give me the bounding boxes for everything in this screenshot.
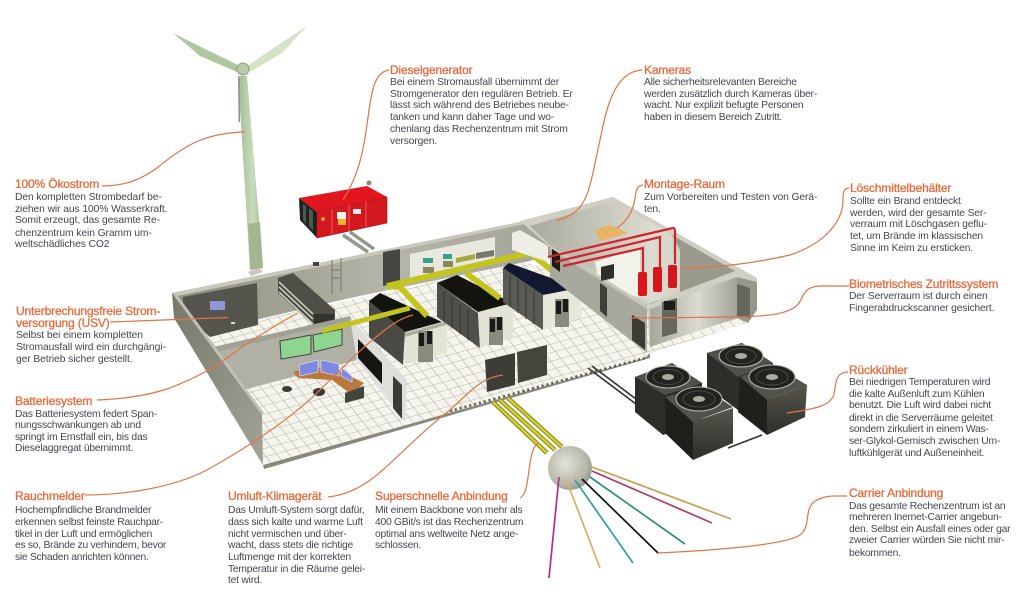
text: Kameras: haben in diesem Bereich Zutritt. xyxy=(644,112,782,123)
text: Rückkühler: luftkühlgerät und Außeneinheit. xyxy=(849,448,984,459)
text: Rückkühler: benutzt. Die Luft wird dabei nicht xyxy=(849,400,991,411)
text: Superschnelle Anbindung: Superschnelle Anbindung xyxy=(375,489,508,503)
green wall screens xyxy=(280,329,342,359)
text: Kameras: Alle sicherheitsrelevanten Bereiche xyxy=(644,77,797,88)
text: Löschmittelbehälter: werden, wird der gesamte Ser- xyxy=(849,208,986,219)
text: Batteriesystem xyxy=(15,394,157,454)
text: Biometrisches Zutrittssystem: Der Serverraum ist durch einen xyxy=(849,291,988,302)
text: Umluft-Klimagerät: tet wird. xyxy=(228,575,262,586)
text: USV: ger Betrieb sicher gestellt. xyxy=(16,354,133,365)
text: Rückkühler xyxy=(849,363,1000,459)
wind turbine xyxy=(173,26,307,276)
text: Rauchmelder: tikel in der Luft und ermöglichen xyxy=(15,529,153,540)
text: Löschmittelbehälter: Löschmittelbehälter xyxy=(850,181,951,195)
cable to dry coolers xyxy=(588,366,762,448)
text: Superschnelle Anbindung: optimal ans weltweite Netz ange- xyxy=(375,529,518,540)
text: 100% Ökostrom xyxy=(14,177,167,250)
text: USV: Unterbrechungsfreie Strom- xyxy=(16,304,160,318)
text: Carrier Anbindung: Carrier Anbindung xyxy=(849,486,943,500)
text: Biometrisches Zutrittssystem xyxy=(849,277,998,314)
control room partition xyxy=(213,318,357,390)
text: Batteriesystem: Dieselaggregat übernimmt. xyxy=(15,443,133,454)
leader lines xyxy=(85,70,849,553)
text: Biometrisches Zutrittssystem: Biometrisches Zutrittssystem xyxy=(849,277,998,291)
cable tube to backbone xyxy=(493,398,562,453)
text: Biometrisches Zutrittssystem: Fingerabdruckscanner gesichert. xyxy=(849,303,994,314)
text: 100% Ökostrom: Den kompletten Strombedarf be- xyxy=(15,192,162,203)
text: Dieselgenerator: lässt sich während des Betriebes neube- xyxy=(390,100,569,111)
text: Dieselgenerator: chenlang das Rechenzentrum mit Strom xyxy=(390,124,568,135)
text: Umluft-Klimagerät xyxy=(227,489,365,586)
text: Rauchmelder: erkennen selbst feinste Rauchpar- xyxy=(15,517,163,528)
text: Dieselgenerator: versorgen. xyxy=(390,136,437,147)
text: Batteriesystem: Das Batteriesystem federt Span- xyxy=(15,409,157,420)
floor xyxy=(188,262,750,465)
text: Carrier Anbindung: bekommen. xyxy=(849,548,901,559)
text: Löschmittelbehälter: Sinne im Keim zu ersticken. xyxy=(850,243,973,254)
text: Löschmittelbehälter xyxy=(849,181,987,254)
carrier cables and backbone sphere xyxy=(548,446,731,578)
text: Umluft-Klimagerät: Temperatur in die Räume gelei- xyxy=(228,564,365,575)
text: Dieselgenerator xyxy=(390,63,573,147)
extinguishing room xyxy=(512,197,757,353)
server rack 2 xyxy=(437,275,513,348)
text: Superschnelle Anbindung: 400 GBit/s ist das Rechenzentrum xyxy=(375,517,523,528)
text: Montage-Raum xyxy=(644,177,817,215)
text: USV xyxy=(16,304,166,365)
text: Kameras: werden zusätzlich durch Kameras über- xyxy=(643,89,817,100)
text: Umluft-Klimagerät: Umluft-Klimagerät xyxy=(228,489,322,503)
text: 100% Ökostrom: weltschädliches CO2 xyxy=(14,239,110,250)
text: Carrier Anbindung: Das gesamte Rechenzentrum ist an xyxy=(849,501,1006,512)
text: Umluft-Klimagerät: dass sich kalte und warme Luft xyxy=(228,517,363,528)
text: Rückkühler: sondern zirkuliert in einem Was- xyxy=(849,424,989,435)
left wall xyxy=(172,293,263,465)
text: Batteriesystem: Batteriesystem xyxy=(15,394,92,408)
text: Rauchmelder: es so, Brände zu verhindern, bevor xyxy=(15,540,167,551)
text: Umluft-Klimagerät: Das Umluft-System sorgt dafür, xyxy=(228,505,364,516)
text: Carrier Anbindung xyxy=(849,486,1011,559)
text: 100% Ökostrom: 100% Ökostrom xyxy=(15,177,99,191)
text: Rückkühler: die kalte Außenluft zum Kühlen xyxy=(849,389,985,400)
text: USV: Stromausfall wird ein durchgängi- xyxy=(16,342,166,353)
text: Superschnelle Anbindung: schlossen. xyxy=(375,540,421,551)
text: Batteriesystem: nungsschwankungen ab und xyxy=(15,420,141,431)
text: Carrier Anbindung: den. Selbst ein Ausfall eines oder gar xyxy=(849,524,1011,535)
text: Dieselgenerator: Stromgenerator den regulären Betrieb. Er xyxy=(390,89,573,100)
text: Rückkühler: Bei niedrigen Temperaturen wird xyxy=(849,377,991,388)
front floor edge xyxy=(263,353,650,469)
operator desk xyxy=(282,360,364,403)
text: USV: Selbst bei einem kompletten xyxy=(16,330,143,341)
back wall xyxy=(172,197,613,335)
text: Umluft-Klimagerät: wacht, dass stets die richtige xyxy=(227,540,354,551)
text: Dieselgenerator: Bei einem Stromausfall übernimmt der xyxy=(390,77,560,88)
text: Dieselgenerator: Dieselgenerator xyxy=(390,63,473,77)
text: Kameras: Kameras xyxy=(644,63,691,77)
gas cylinders xyxy=(638,265,677,296)
text: 100% Ökostrom: Somit erzeugt, das gesamte Re- xyxy=(15,215,160,226)
text: Löschmittelbehälter: verraum mit Löschgasen geflu- xyxy=(850,219,987,230)
front wall xyxy=(650,277,737,347)
text: USV: versorgung (USV) xyxy=(16,316,110,330)
data center building xyxy=(172,197,750,469)
text: Rückkühler: Rückkühler xyxy=(849,363,908,377)
text: Montage-Raum: ten. xyxy=(644,204,661,215)
text: Rauchmelder: Hochempfindliche Brandmelder xyxy=(15,505,152,516)
server rack 1 xyxy=(369,293,447,365)
text: Superschnelle Anbindung: Mit einem Backbone von mehr als xyxy=(375,505,522,516)
text: Montage-Raum: Zum Vorbereiten und Testen von Gerä- xyxy=(644,192,817,203)
text: Umluft-Klimagerät: nicht vermischen und über- xyxy=(228,529,346,540)
white cabinet xyxy=(512,230,548,262)
UPS unit xyxy=(183,283,258,337)
server rack 3 xyxy=(503,263,582,330)
yellow air ducts xyxy=(322,253,573,331)
text: Kameras xyxy=(643,63,817,123)
text: Superschnelle Anbindung xyxy=(375,489,523,551)
server room partition xyxy=(350,318,407,422)
battery cabinet xyxy=(278,273,335,325)
text: Batteriesystem: springt im Ernstfall ein, bis das xyxy=(15,432,147,443)
text: Rauchmelder: sie Schaden anrichten können. xyxy=(15,552,149,563)
text: Carrier Anbindung: mehreren Inernet-Carrier angebun- xyxy=(849,512,1002,523)
back wall equipment xyxy=(313,237,495,294)
text: Löschmittelbehälter: Sollte ein Brand entdeckt xyxy=(850,196,961,207)
text: Löschmittelbehälter: tet, um Brände im klassischen xyxy=(850,231,983,242)
text: Rückkühler: direkt in die Serverräume geleitet xyxy=(849,413,993,424)
red gas pipes xyxy=(548,228,675,272)
text: Umluft-Klimagerät: Luftmenge mit der korrekten xyxy=(228,552,351,563)
text: 100% Ökostrom: ziehen wir aus 100% Wasserkraft. xyxy=(15,204,167,215)
text: Dieselgenerator: tanken und kann daher Tage und wo- xyxy=(390,112,554,123)
text: Rückkühler: ser-Glykol-Gemisch zwischen Um- xyxy=(849,436,1000,447)
diesel generator xyxy=(299,180,387,252)
text: Rauchmelder: Rauchmelder xyxy=(15,489,85,503)
floor units xyxy=(485,345,547,392)
partition with doors xyxy=(550,247,647,353)
text: 100% Ökostrom: chenzentrum kein Gramm um- xyxy=(15,228,152,239)
text: Rauchmelder xyxy=(15,489,167,563)
dry cooler units xyxy=(635,343,807,460)
text: Carrier Anbindung: zweier Carrier würden Sie nicht mir- xyxy=(849,535,1004,546)
text: Montage-Raum: Montage-Raum xyxy=(644,177,725,191)
text: Kameras: wacht. Nur explizit befugte Personen xyxy=(643,100,804,111)
